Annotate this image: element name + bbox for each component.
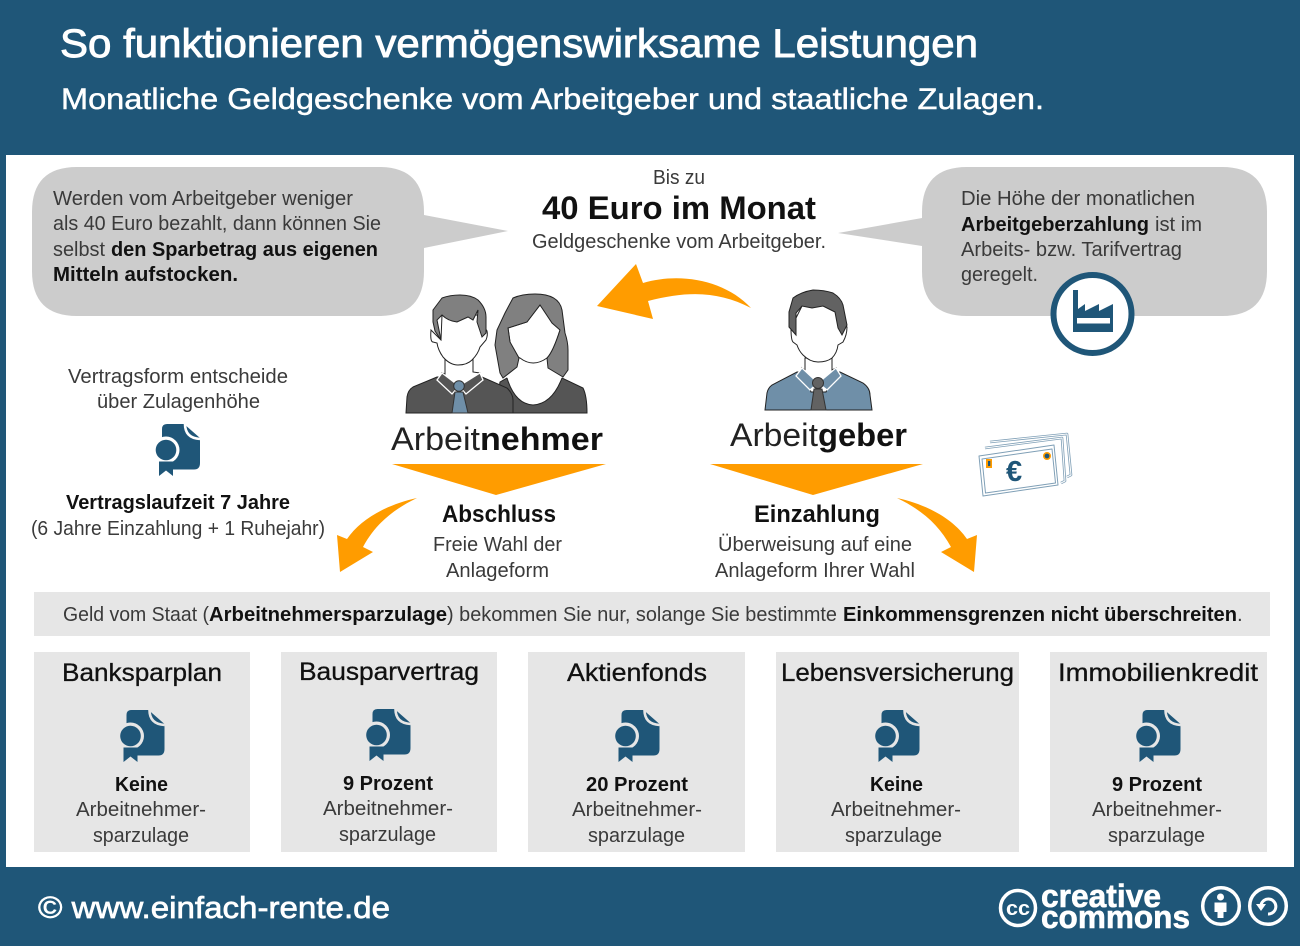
text: Einzahlung (715, 501, 915, 582)
icon: contract (152, 424, 200, 476)
text: Abschluss: Freie Wahl der (433, 533, 562, 556)
text: Vertragslaufzeit: (6 Jahre Einzahlung + 1 Ruhejahr) (31, 517, 325, 540)
speech bubble: right: Arbeits- bzw. Tarifvertrag (961, 238, 1182, 261)
card: Immobilienkredit: 9 Prozent (1112, 773, 1202, 796)
speech bubble: left: Werden vom Arbeitgeber weniger (53, 187, 353, 210)
subtitle: Monatliche Geldgeschenke vom Arbeitgeber und staatliche Zulagen. (61, 83, 1044, 116)
text: Abschluss (433, 501, 562, 582)
speech bubble: right (838, 167, 1267, 316)
text: Vertragsform: über Zulagenhöhe (97, 390, 260, 413)
card: Bausparvertrag (281, 652, 497, 852)
headline: 40 Euro im Monat: Bis zu (653, 166, 705, 189)
text: Abschluss: Anlageform (446, 559, 549, 582)
banner: Arbeitnehmersparzulage: ) bekommen Sie nur, solange Sie bestimmte (447, 603, 837, 626)
speech bubble: right: Arbeitgeberzahlung (961, 213, 1149, 236)
card: Lebensversicherung: Arbeitnehmer- (831, 798, 961, 821)
card: Bausparvertrag: Arbeitnehmer- (323, 797, 453, 820)
footer: creative commons logo: cc (1006, 898, 1030, 920)
person icon: employer (765, 290, 872, 410)
label: Arbeitgeber: Arbeit (730, 417, 818, 453)
card: Bausparvertrag: Bausparvertrag (299, 658, 479, 686)
icon: banknotes: € (1006, 456, 1022, 488)
text: Abschluss: Abschluss (442, 501, 556, 528)
man (406, 295, 513, 413)
label: Arbeitnehmer: Arbeit (391, 421, 480, 457)
woman (495, 294, 587, 413)
card: Immobilienkredit: sparzulage (1108, 824, 1205, 847)
text: Einzahlung: Anlageform Ihrer Wahl (715, 559, 915, 582)
card: Banksparplan: Arbeitnehmer- (76, 798, 206, 821)
speech bubble: left (32, 167, 508, 316)
arrow: curved to bottom left (337, 498, 417, 572)
person icons: employee man and woman (406, 294, 587, 413)
card: Immobilienkredit (1050, 652, 1267, 852)
headline: 40 Euro im Monat: Geldgeschenke vom Arbeitgeber. (532, 230, 826, 253)
card: Immobilienkredit: Immobilienkredit (1058, 659, 1258, 687)
arrow: down triangle right (710, 464, 923, 495)
card: Banksparplan: Banksparplan (62, 659, 222, 687)
speech bubble: left: den Sparbetrag aus eigenen (111, 238, 378, 261)
text: Vertragslaufzeit (31, 491, 325, 540)
arrow: down triangle left (392, 464, 606, 495)
card: Lebensversicherung: Lebensversicherung (781, 659, 1014, 687)
banner: Arbeitnehmersparzulage (34, 592, 1270, 636)
headline: 40 Euro im Monat (532, 166, 826, 253)
footer: creative commons logo (1000, 878, 1286, 935)
footer: creative commons logo: creative (1041, 878, 1161, 914)
card: Aktienfonds: Aktienfonds (567, 659, 707, 687)
card: Lebensversicherung: Keine (870, 773, 923, 796)
speech bubble: right: ist im (1155, 213, 1202, 236)
speech bubble: left: Mitteln aufstocken. (53, 263, 238, 286)
label: Arbeitnehmer (391, 421, 603, 457)
icon: factory (1054, 275, 1132, 353)
footer: website: © www.einfach-rente.de (38, 890, 390, 925)
text: Vertragsform (68, 365, 288, 413)
headline: 40 Euro im Monat: 40 Euro im Monat (542, 190, 816, 226)
card: Bausparvertrag: sparzulage (339, 823, 436, 846)
arrow: employer to employees (597, 264, 751, 319)
banner: Arbeitnehmersparzulage: Geld vom Staat ( (63, 603, 209, 626)
card: Banksparplan (34, 652, 250, 852)
card: Aktienfonds (528, 652, 745, 852)
speech bubble: right: Die Höhe der monatlichen (961, 187, 1195, 210)
text: Vertragslaufzeit: Vertragslaufzeit 7 Jahre (66, 491, 290, 514)
text: Einzahlung: Überweisung auf eine (718, 533, 912, 556)
card: Aktienfonds: Arbeitnehmer- (572, 798, 702, 821)
label: Arbeitgeber: geber (818, 417, 907, 453)
text: Vertragsform: Vertragsform entscheide (68, 365, 288, 388)
icon: banknotes (979, 434, 1071, 496)
footer: creative commons logo: commons (1041, 899, 1190, 935)
card: Immobilienkredit: Arbeitnehmer- (1092, 798, 1222, 821)
speech bubble: left: als 40 Euro bezahlt, dann können Sie (53, 212, 381, 235)
card: Banksparplan: Keine (115, 773, 168, 796)
speech bubble: right: geregelt. (961, 263, 1038, 286)
arrow: curved to bottom right (897, 498, 977, 572)
card: Aktienfonds: 20 Prozent (586, 773, 688, 796)
card: Bausparvertrag: 9 Prozent (343, 772, 433, 795)
card: Lebensversicherung (776, 652, 1019, 852)
banner: Arbeitnehmersparzulage: Einkommensgrenzen nicht überschreiten (843, 603, 1237, 626)
banner: Arbeitnehmersparzulage: . (1237, 603, 1243, 626)
banner: Arbeitnehmersparzulage: Arbeitnehmersparzulage (209, 603, 447, 626)
card: Banksparplan: sparzulage (93, 824, 189, 847)
main white panel (6, 155, 1294, 867)
label: Arbeitnehmer: nehmer (480, 421, 603, 457)
text: Einzahlung: Einzahlung (754, 501, 880, 528)
card: Lebensversicherung: sparzulage (845, 824, 942, 847)
speech bubble: left: selbst (53, 238, 105, 261)
card: Aktienfonds: sparzulage (588, 824, 685, 847)
label: Arbeitgeber (730, 417, 907, 453)
title: So funktionieren vermögenswirksame Leistungen (60, 22, 978, 66)
